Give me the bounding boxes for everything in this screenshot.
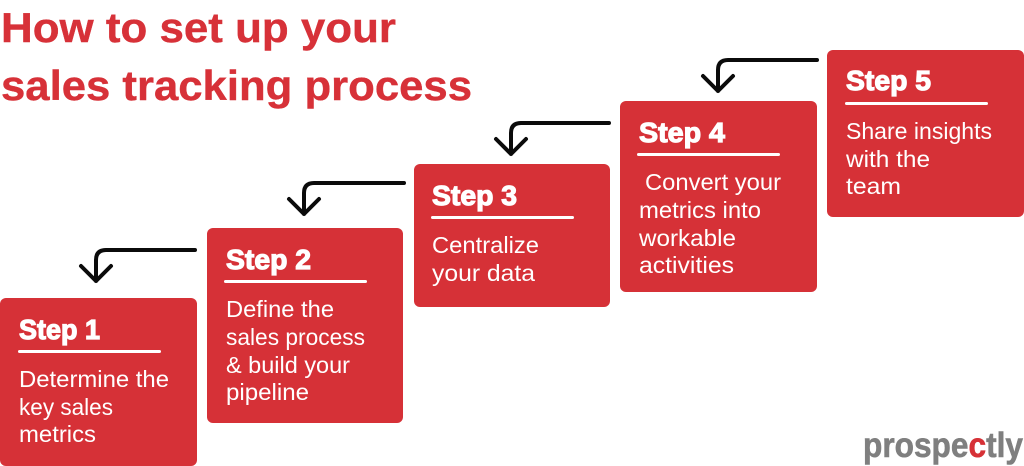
text: step 4 description [638,169,781,278]
arrow: step 5 to step 4 [703,60,817,91]
heading: step 2: Step 2 [226,244,311,275]
text: step 2 description: & build your [226,352,350,378]
arrow: step 3 to step 2 [289,183,404,214]
heading: step 1: Step 1 [19,314,100,345]
panel: step 4 [620,101,817,292]
text: step 5 description: team [846,173,901,199]
text: step 2 description [226,296,365,405]
text: step 4 description: activities [639,252,734,278]
text: step 5 description [845,118,992,199]
text: step 4 description: metrics into [639,197,761,223]
panel: step 1 [0,298,197,466]
text: step 3 description [432,232,539,286]
text: step 2 description: pipeline [226,379,309,405]
text: step 1 description: metrics [19,421,96,447]
heading: step 5: Step 5 [846,65,931,96]
text: step 1 description: Determine the [19,366,169,392]
text: step 3 description: Centralize [432,232,539,258]
heading: step 4: Step 4 [639,117,725,148]
title: How to set up your [1,4,396,51]
arrow: step 4 to step 3 [496,123,609,154]
text: step 4 description: Convert your [645,169,781,195]
heading: step 3: Step 3 [432,180,517,211]
panel: step 2 [207,228,403,423]
text: step 2 description: sales process [226,324,365,350]
text: step 1 description: key sales [19,394,113,420]
panel: step 3 [414,164,610,307]
text: step 5 description: Share insights [846,118,992,144]
title [1,4,472,109]
text: step 4 description: workable [638,225,736,251]
text: step 3 description: your data [432,260,535,286]
text: step 1 description [19,366,169,447]
text: step 2 description: Define the [226,296,334,322]
panel: step 5 [827,50,1024,217]
arrow: step 2 to step 1 [81,250,195,281]
title: sales tracking process [1,62,472,109]
logo: prospectly: prospectly [863,426,1023,465]
text: step 5 description: with the [845,146,930,172]
